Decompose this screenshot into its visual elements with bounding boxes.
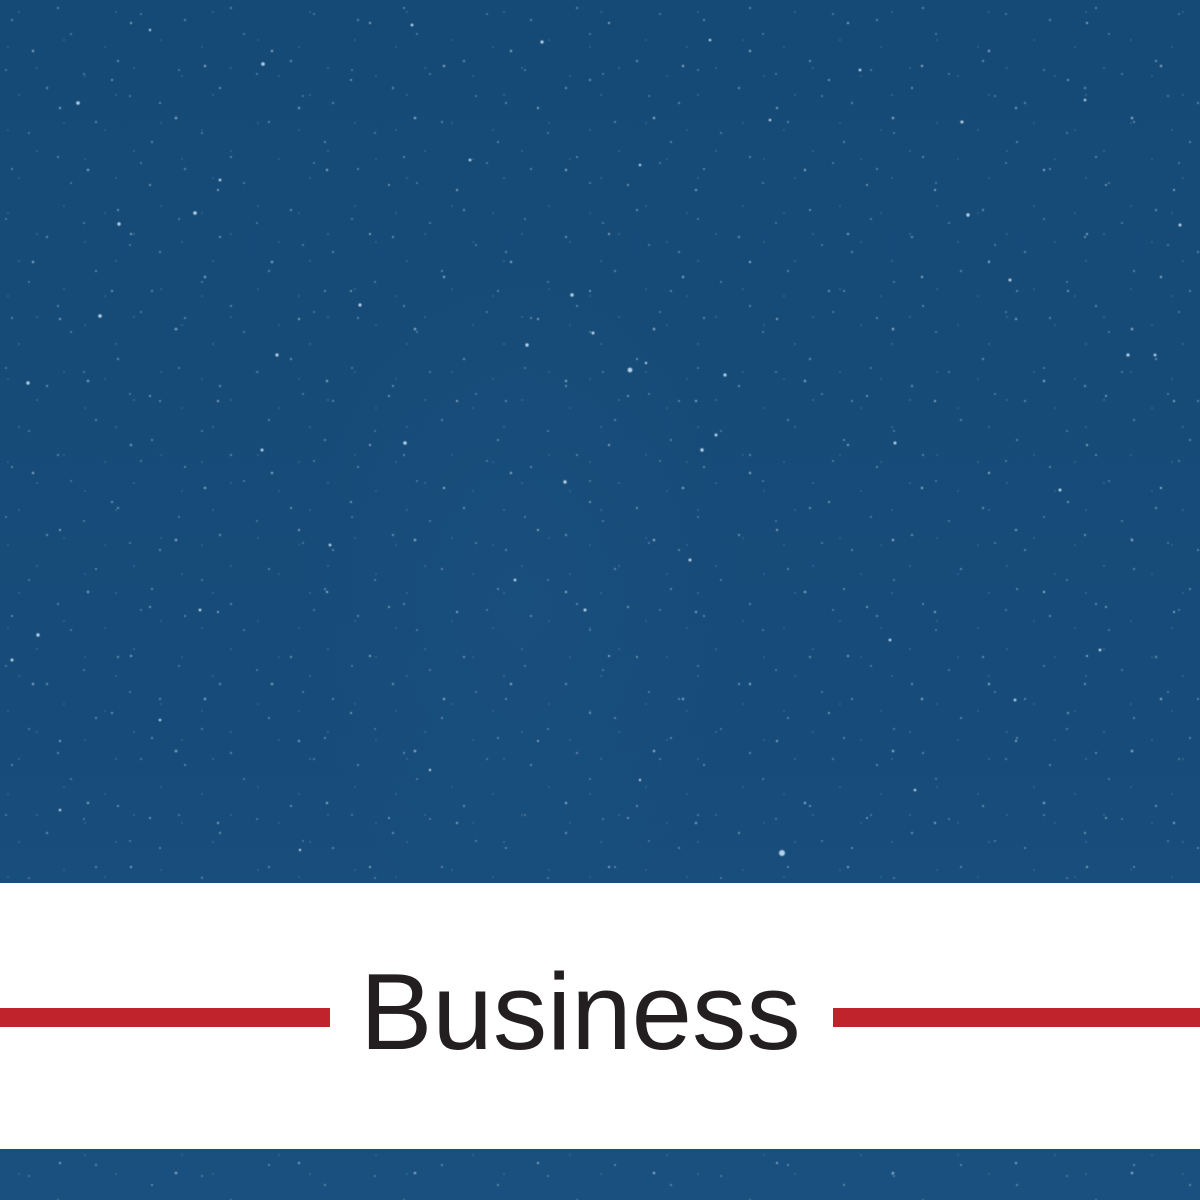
left red rule [0,1008,330,1026]
title: Business: Business [360,952,801,1073]
right red rule [833,1008,1200,1026]
white title band [0,883,1200,1149]
